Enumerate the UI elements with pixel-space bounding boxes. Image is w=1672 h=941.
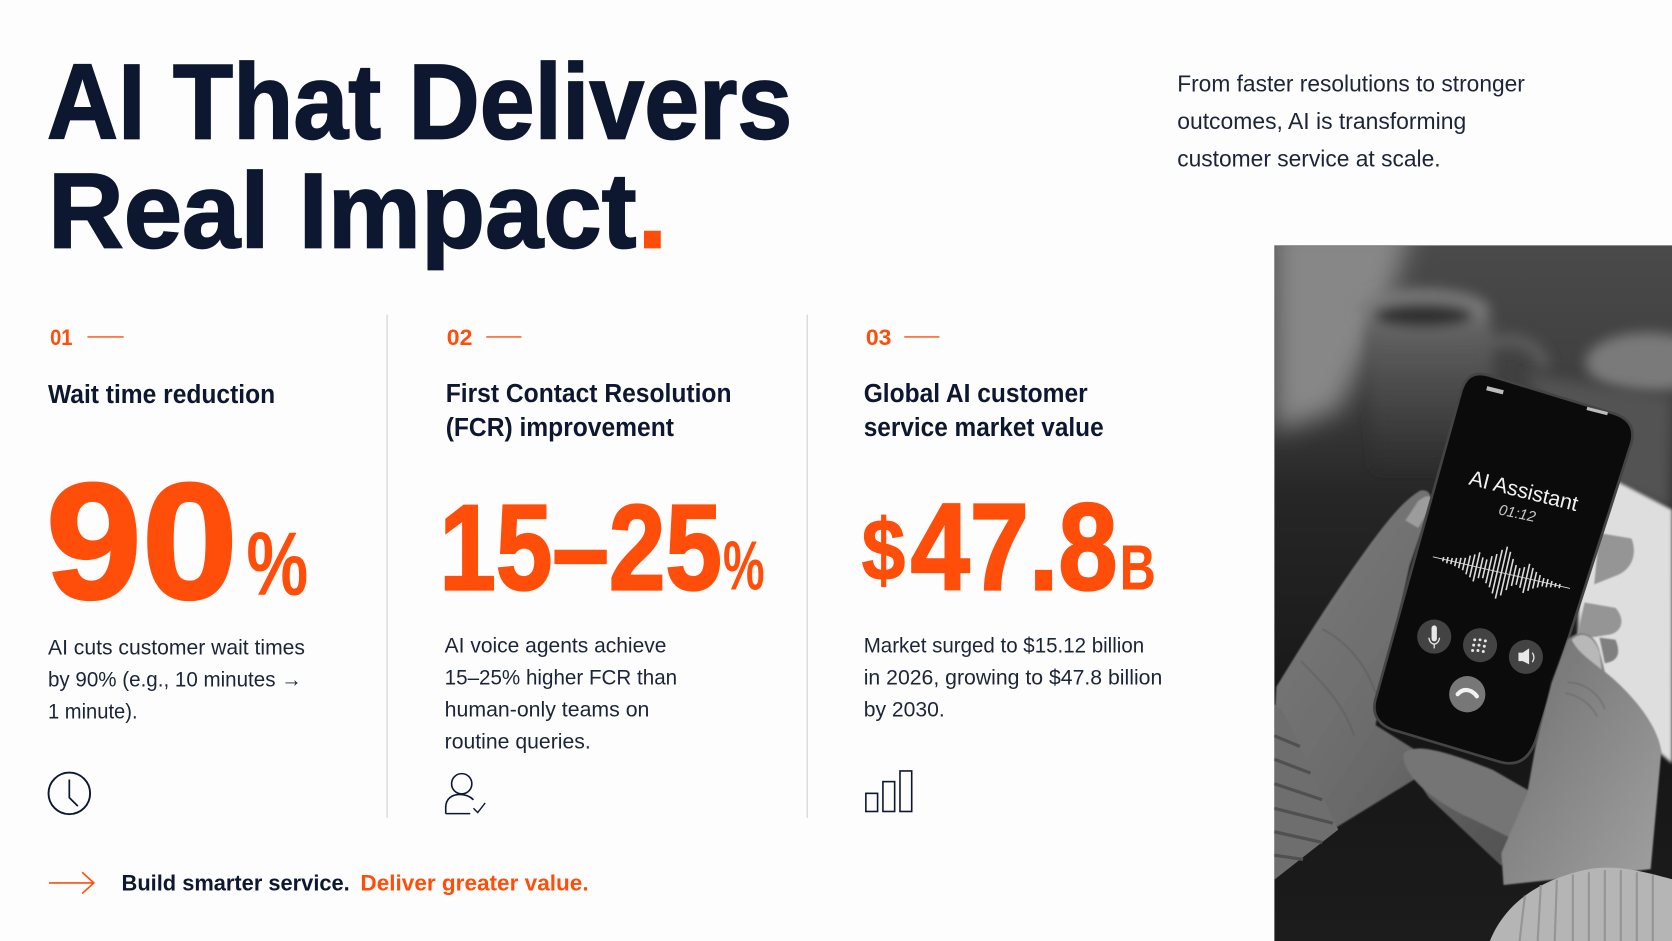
caller name: AI Assistant (1467, 466, 1581, 516)
call to action: Build smarter service. (122, 870, 350, 895)
call to action: Deliver greater value. (360, 870, 589, 895)
description (48, 636, 305, 724)
right hand (1501, 633, 1661, 885)
stat 90%: 90 (46, 449, 238, 634)
title: Real Impact (48, 150, 637, 270)
description: AI cuts customer wait times (48, 636, 305, 660)
title (47, 42, 792, 270)
status bar (1486, 386, 1608, 415)
divider (386, 315, 388, 818)
panel: wait time reduction (46, 325, 308, 814)
heading: service market value (864, 414, 1104, 442)
photo: hands holding phone on AI call (1274, 224, 1672, 941)
phone (1374, 374, 1633, 763)
number 01 (50, 325, 124, 350)
stat 90%: % (246, 514, 308, 614)
number 01: 01 (50, 325, 73, 350)
intro text: outcomes, AI is transforming (1177, 108, 1466, 134)
panel: global AI customer service market value (862, 325, 1162, 811)
description: routine queries. (445, 730, 591, 754)
sweater: left cuff (1274, 704, 1338, 880)
description: human-only teams on (445, 698, 649, 722)
heading: Global AI customer (864, 380, 1088, 408)
number 03 (866, 325, 939, 350)
icon: person with check (446, 774, 485, 814)
heading (864, 380, 1104, 442)
paper on the table (1578, 478, 1672, 763)
heading: Wait time reduction (48, 381, 275, 409)
intro text: From faster resolutions to stronger (1177, 71, 1525, 97)
description: AI voice agents achieve (445, 634, 666, 658)
call to action (122, 870, 589, 895)
description: Market surged to $15.12 billion (864, 634, 1144, 658)
title: AI That Delivers (47, 42, 792, 162)
intro text: customer service at scale. (1177, 145, 1441, 171)
icon: clock (49, 773, 90, 814)
description (445, 634, 677, 754)
call timer: 01:12 (1497, 502, 1538, 526)
voice waveform (1432, 546, 1570, 599)
divider (806, 315, 808, 818)
stat $47.8B: 47.8 (911, 479, 1118, 617)
title: . (638, 150, 667, 270)
number 02 (447, 325, 521, 350)
background blur: right object (1586, 333, 1672, 392)
arrow (49, 872, 94, 894)
heading: (FCR) improvement (446, 414, 674, 442)
stat 15–25%: 15–25 (439, 480, 722, 616)
stat $47.8B: B (1120, 532, 1156, 604)
call controls (1417, 620, 1543, 712)
stat 15–25%: % (723, 527, 765, 605)
intro text (1177, 71, 1525, 171)
number 02: 02 (447, 325, 472, 350)
description (864, 634, 1162, 722)
icon: bar chart (866, 771, 912, 811)
stat $47.8B: $ (862, 501, 905, 599)
background blur: coffee mug (1362, 283, 1550, 427)
description: in 2026, growing to $47.8 billion (864, 666, 1162, 690)
heading (446, 380, 732, 442)
panel: first contact resolution (439, 325, 765, 814)
left hand (1274, 490, 1634, 866)
sweater: right cuff (1490, 868, 1672, 941)
description: by 2030. (864, 698, 945, 722)
number 03: 03 (866, 325, 891, 350)
heading: First Contact Resolution (446, 380, 732, 408)
description: 15–25% higher FCR than (445, 666, 677, 690)
background blur: left highlight (1274, 224, 1413, 432)
description: 1 minute). (48, 700, 138, 724)
description: by 90% (e.g., 10 minutes → (48, 668, 302, 692)
